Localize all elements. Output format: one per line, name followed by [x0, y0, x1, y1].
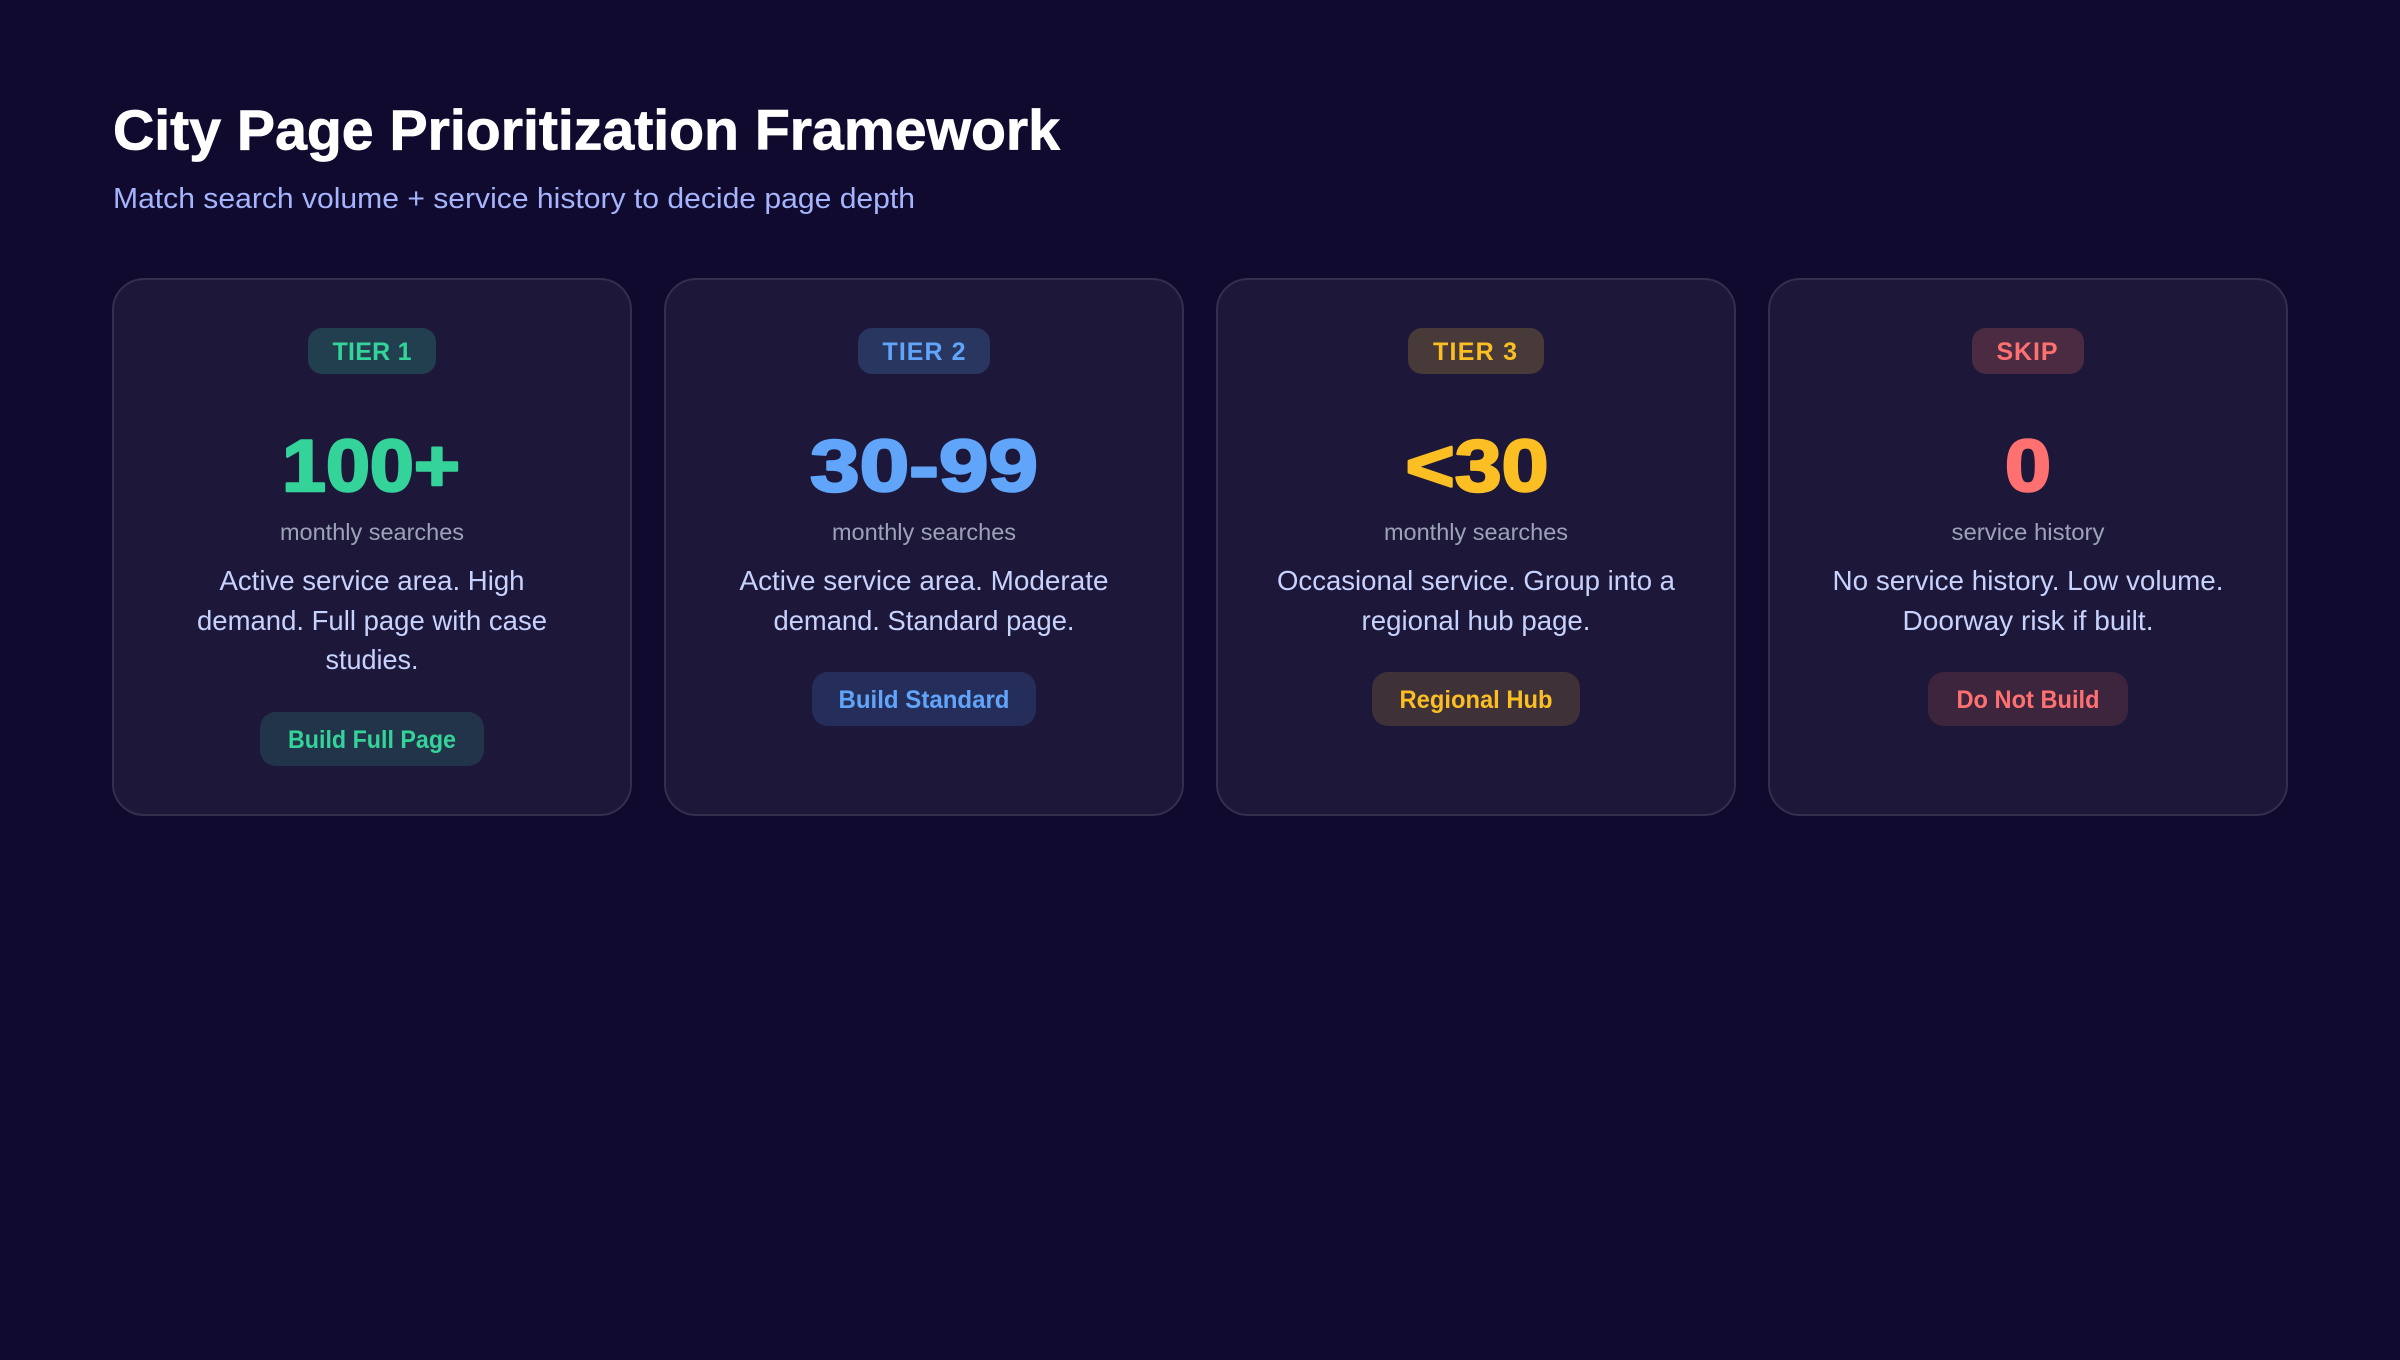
title: City Page Prioritization Framework [113, 98, 1060, 162]
tier 1 unit label: monthly searches [280, 519, 464, 545]
tier 3 description [1277, 565, 1675, 636]
tier 2 badge: TIER 2 [882, 338, 966, 366]
panel: tier 3 [1217, 279, 1735, 815]
tier 1 badge: TIER 1 [332, 338, 412, 366]
subtitle: Match search volume + service history to decide page depth [113, 183, 915, 215]
skip description: No service history. Low volume. [1832, 565, 2224, 596]
tier 1 badge [308, 328, 436, 374]
panel: skip [1769, 279, 2287, 815]
tier 3 action button [1372, 672, 1580, 726]
skip badge: SKIP [1996, 338, 2058, 366]
tier 3 action button: Regional Hub [1400, 686, 1552, 714]
tier 1 description: Active service area. High [220, 565, 524, 596]
tier 1 number: 100+ [282, 426, 460, 507]
tier 3 unit label: monthly searches [1384, 519, 1568, 545]
skip badge [1972, 328, 2084, 374]
tier 3 badge [1408, 328, 1544, 374]
tier 2 action button [812, 672, 1036, 726]
tier 2 badge [858, 328, 990, 374]
skip description: Doorway risk if built. [1902, 605, 2154, 636]
panel: tier 1 [113, 279, 631, 815]
skip action button [1928, 672, 2128, 726]
tier 3 description: Occasional service. Group into a [1277, 565, 1675, 596]
tier 1 description: studies. [326, 644, 418, 675]
skip unit label: service history [1952, 519, 2105, 545]
skip number: 0 [2005, 426, 2051, 507]
skip description [1832, 565, 2224, 636]
tier 1 action button: Build Full Page [288, 726, 456, 754]
tier 3 number: <30 [1406, 426, 1548, 507]
tier 1 description [197, 565, 547, 675]
tier 2 description: Active service area. Moderate [740, 565, 1108, 596]
tier 2 number: 30-99 [810, 426, 1038, 507]
tier 2 description [740, 565, 1108, 636]
tier 3 description: regional hub page. [1362, 605, 1590, 636]
tier 2 description: demand. Standard page. [774, 605, 1074, 636]
tier 2 unit label: monthly searches [832, 519, 1016, 545]
tier 1 action button [260, 712, 484, 766]
tier 3 badge: TIER 3 [1433, 338, 1517, 366]
skip action button: Do Not Build [1956, 686, 2100, 714]
tier 2 action button: Build Standard [838, 686, 1010, 714]
tier 1 description: demand. Full page with case [197, 605, 547, 636]
panel: tier 2 [665, 279, 1183, 815]
